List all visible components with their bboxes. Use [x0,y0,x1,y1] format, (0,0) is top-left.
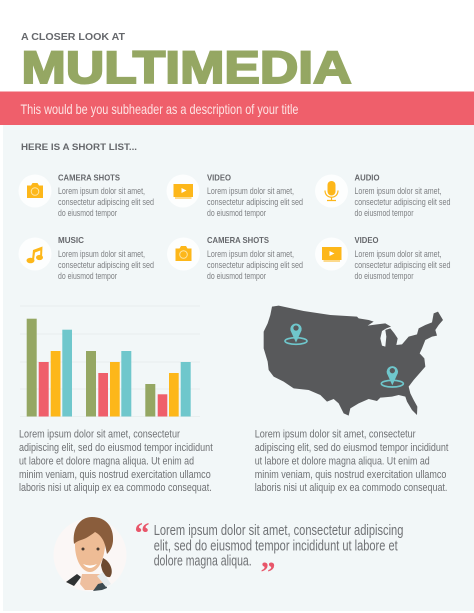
item: camera shots: do eiusmod tempor [58,208,117,219]
item: video: consectetur adipiscing elit sed [207,197,303,208]
header [21,31,352,93]
text block: left [19,428,213,494]
item: camera shots 2: do eiusmod tempor [207,271,266,282]
item: camera shots 2 [167,235,303,282]
item: audio: do eiusmod tempor [354,208,414,219]
item: music: Lorem ipsum dolor sit amet, [58,249,145,260]
text block: left: minim veniam, quis nostrud exercitation ullamco [19,469,211,481]
item: video: Lorem ipsum dolor sit amet, [207,186,294,197]
pin: southeast [381,366,403,387]
kicker: A CLOSER LOOK AT [21,31,126,43]
item: camera shots: consectetur adipiscing elit sed [58,197,154,208]
panel: background [3,125,474,611]
portrait [54,517,126,592]
text block: left: laboris nisi ut aliquip ex ea commodo consequat. [19,482,212,494]
item: video 2: do eiusmod tempor [354,271,414,282]
quote [134,517,403,589]
quote mark: open: “ [134,517,150,550]
item: camera shots: Lorem ipsum dolor sit amet, [58,186,145,197]
title: MULTIMEDIA [22,42,352,93]
item: audio: AUDIO [354,172,380,182]
item: video 2: VIDEO [354,235,379,245]
list heading: HERE IS A SHORT LIST... [21,142,137,153]
subheader band: This would be you subheader as a description of your title [20,101,299,117]
item: camera shots [18,172,154,219]
quote: elit, sed do eiusmod tempor incididunt ut labore et [154,539,398,555]
panel: feature list [18,172,450,282]
quote mark: close: ” [260,556,276,589]
item: audio [315,172,450,219]
text block: left: adipiscing elit, sed do eiusmod tempor incididunt [19,442,213,454]
text block: right: Lorem ipsum dolor sit amet, consectetur [255,428,416,440]
text block: right [255,428,448,494]
item: camera shots 2: consectetur adipiscing elit sed [207,260,303,271]
bar chart [20,306,200,416]
map: USA with pins [264,306,443,416]
text block: left: ut labore et dolore magna aliqua. Ut enim ad [19,456,194,468]
quote: Lorem ipsum dolor sit amet, consectetur adipiscing [154,523,403,539]
item: music: MUSIC [58,235,84,245]
subheader band [0,92,474,125]
item: audio: Lorem ipsum dolor sit amet, [354,186,442,197]
item: camera shots: CAMERA SHOTS [58,172,120,182]
item: music [18,235,154,282]
item: video 2 [315,235,450,282]
pin: west [285,323,307,344]
item: camera shots 2: CAMERA SHOTS [207,235,269,245]
item: camera shots 2: Lorem ipsum dolor sit amet, [207,249,294,260]
item: video: do eiusmod tempor [207,208,266,219]
item: video [166,172,303,219]
item: video: VIDEO [207,172,231,182]
quote: dolore magna aliqua. [154,554,252,570]
item: music: do eiusmod tempor [58,271,117,282]
item: video 2: Lorem ipsum dolor sit amet, [354,249,442,260]
text block: left: Lorem ipsum dolor sit amet, consectetur [19,428,180,440]
text block: right: ut labore et dolore magna aliqua. Ut enim ad [255,456,430,468]
item: music: consectetur adipiscing elit sed [58,260,154,271]
